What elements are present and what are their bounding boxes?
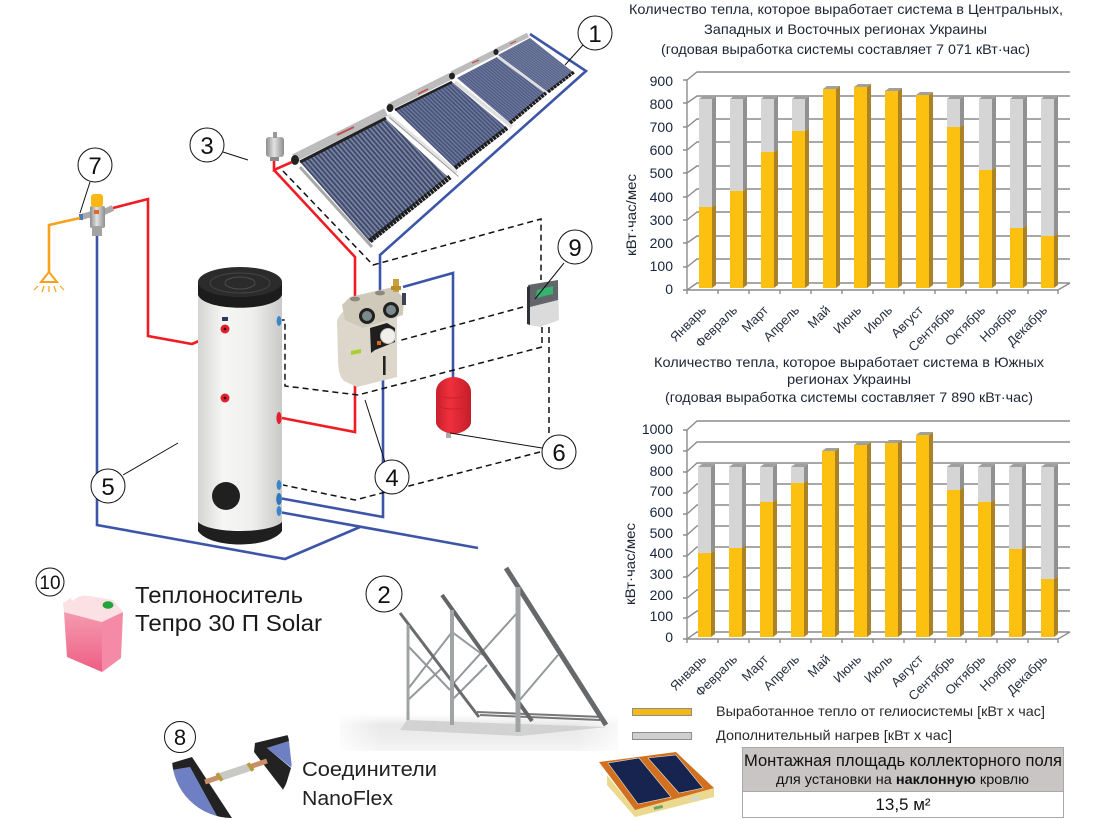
chart 2 y axis labels: 200 (650, 587, 673, 603)
number badge 3: 3 (200, 133, 214, 160)
chart 1 y axis labels: 600 (650, 142, 673, 158)
legend (632, 703, 1045, 743)
chart 1 y axis labels: 400 (650, 189, 673, 205)
chart 2 y axis labels: 800 (650, 463, 673, 479)
solar collector array (291, 35, 574, 247)
chart 1 y axis labels: 700 (650, 119, 673, 135)
chart 1 month labels: Июль (861, 302, 895, 337)
number badge 1: 1 (588, 21, 602, 48)
chart 1 month labels: Декабрь (1004, 302, 1050, 349)
chart 1 y axis labels: 0 (665, 281, 673, 297)
chart 2 title (654, 354, 1044, 405)
number badge 5 (91, 469, 125, 503)
chart 2 month labels: Август (888, 651, 926, 690)
right collector corner (267, 741, 292, 768)
number badge 3 (190, 128, 224, 162)
collector panel 1 (291, 112, 458, 247)
chart 1 y axis labels: 100 (650, 258, 673, 274)
chart 1 month labels: Июнь (830, 302, 864, 336)
mounting area table: Монтажная площадь коллекторного поля (744, 751, 1062, 770)
connector text (302, 759, 437, 810)
circulation pump (370, 323, 396, 353)
tank top cap (198, 267, 282, 308)
tank red and blue fittings (220, 316, 282, 516)
chart 2 month labels: Сентябрь (905, 651, 957, 703)
chart 1 month labels: Апрель (760, 302, 802, 344)
chart 2 y axis labels (642, 421, 673, 645)
number badge 7 (78, 148, 112, 182)
chart 2 month labels: Декабрь (1004, 651, 1050, 698)
chart 2 y axis labels: 300 (650, 566, 673, 582)
connector photo (8) (172, 735, 292, 818)
chart 1 title (629, 1, 1063, 57)
chart 2 y axis title: кВт·час/мес (622, 523, 638, 605)
chart 1: monthly heat, central regions (623, 72, 1070, 354)
chart 1 grid (683, 72, 1070, 294)
chart 2 title: (годовая выработка системы составляет 7 890 кВт·час) (665, 389, 1033, 405)
frame braces (408, 613, 558, 702)
chart 1 month labels: Ноябрь (977, 302, 1019, 345)
chart 2 y axis labels: 500 (650, 525, 673, 541)
chart 1 month labels: Март (739, 302, 771, 335)
mounting frame (2) (340, 568, 618, 751)
number badge 10 (36, 568, 64, 596)
chart 2 y axis labels: 600 (650, 504, 673, 520)
mixing valve (7) (79, 194, 113, 236)
brass safety valve (391, 279, 406, 305)
connector text: NanoFlex (302, 788, 393, 810)
chart 1 y axis title: кВт·час/мес (623, 174, 639, 256)
copper connector pipe (205, 761, 267, 782)
number badge 2: 2 (377, 582, 391, 609)
chart 2 month labels: Июль (861, 651, 895, 686)
chart 1 month labels: Сентябрь (905, 302, 957, 354)
chart 2 title: регионах Украины (787, 371, 911, 387)
pump gauges (359, 302, 399, 324)
hot water outlet pipe and shower (34, 218, 80, 292)
number badge 6: 6 (552, 440, 566, 467)
left collector corner (172, 767, 218, 818)
chart 2 month labels: Ноябрь (977, 651, 1019, 694)
number badge 5: 5 (101, 474, 115, 501)
chart 1 y axis labels (650, 73, 673, 297)
sensor wiring dashed (280, 171, 549, 500)
chart 2: monthly heat, southern regions (622, 421, 1070, 703)
collector panel 4 (493, 35, 574, 92)
number badge 9 (558, 230, 592, 264)
chart 2 y axis labels: 0 (665, 629, 673, 645)
air vent (3) (266, 132, 284, 161)
coolant text (135, 582, 322, 636)
connector text: Соединители (302, 759, 437, 781)
pump top block (342, 287, 404, 328)
chart 2 y axis labels: 400 (650, 545, 673, 561)
coolant text: Тепро 30 П Solar (135, 610, 322, 636)
chart 1 month labels: Январь (667, 302, 709, 345)
solar controller (9) (527, 280, 559, 327)
frame posts (406, 625, 410, 720)
coolant text: Теплоноситель (135, 582, 303, 608)
chart 2 month labels (667, 651, 1050, 703)
legend: extra heating: Дополнительный нагрев [кВт х час] (716, 727, 952, 743)
chart 2 grid (683, 421, 1070, 643)
collector panel 3 (449, 52, 547, 123)
piping: blue cold loop (97, 34, 586, 559)
pump body (337, 310, 397, 387)
chart 1 y axis labels: 200 (650, 235, 673, 251)
number badge 9: 9 (568, 235, 582, 262)
chart 2 month labels: Июнь (830, 651, 864, 685)
tank bottom band (198, 522, 282, 544)
chart 2 month labels: Май (805, 652, 833, 680)
number badge 4 (375, 460, 409, 494)
tank service flange (212, 482, 240, 510)
number badge 2 (366, 576, 402, 612)
number badge 8: 8 (174, 725, 186, 750)
chart 2 title: Количество тепла, которое выработает система в Южных (654, 354, 1044, 370)
chart 1 title: (годовая выработка системы составляет 7 071 кВт·час) (661, 41, 1030, 57)
chart 1 title: Западных и Восточных регионах Украины (704, 21, 987, 37)
chart 2 y axis labels: 900 (650, 441, 673, 457)
collector panel 2 (387, 76, 512, 168)
mounting area table (742, 748, 1064, 818)
chart 2 month labels: Март (739, 651, 771, 684)
number badge 7: 7 (88, 153, 102, 180)
coolant canister (10) (63, 594, 123, 672)
chart 2 y axis labels: 1000 (642, 421, 673, 437)
mounting area table: 13,5 м² (875, 795, 931, 814)
chart 1 month labels (667, 302, 1050, 354)
chart 2 month labels: Апрель (760, 651, 802, 693)
chart 1 bars (699, 84, 1058, 288)
mounting area table: для установки на наклонную кровлю (776, 771, 1029, 787)
chart 2 month labels: Январь (667, 651, 709, 694)
piping: red hot loop (113, 160, 355, 432)
chart 1 y axis labels: 900 (650, 73, 673, 89)
chart 2 month labels: Февраль (692, 651, 740, 699)
number badge 1 (578, 16, 612, 50)
number badge 10: 10 (39, 573, 61, 594)
chart 1 title: Количество тепла, которое выработает система в Центральных, (629, 1, 1063, 17)
chart 1 y axis labels: 300 (650, 212, 673, 228)
chart 2 y axis labels: 700 (650, 483, 673, 499)
legend: solar heat: Выработанное тепло от гелиосистемы [кВт х час] (716, 703, 1045, 719)
roof illustration (599, 752, 714, 817)
leader lines (80, 45, 583, 475)
chart 1 month labels: Октябрь (942, 302, 988, 349)
chart 2 bars (698, 432, 1058, 637)
frame bottom rails (477, 712, 603, 720)
number badge 6 (542, 435, 576, 469)
chart 1 month labels: Май (805, 303, 833, 331)
number badge 8 (164, 722, 196, 752)
frame rails (400, 613, 479, 717)
chart 2 month labels: Октябрь (942, 651, 988, 698)
chart 2 y axis labels: 100 (650, 608, 673, 624)
number badge 4: 4 (385, 465, 399, 492)
chart 1 month labels: Август (888, 302, 926, 341)
chart 1 month labels: Февраль (692, 302, 740, 350)
pump group (4) (337, 279, 406, 387)
expansion vessel (6) (436, 377, 471, 438)
storage tank (5) (198, 267, 282, 544)
chart 1 y axis labels: 500 (650, 165, 673, 181)
chart 1 y axis labels: 800 (650, 96, 673, 112)
